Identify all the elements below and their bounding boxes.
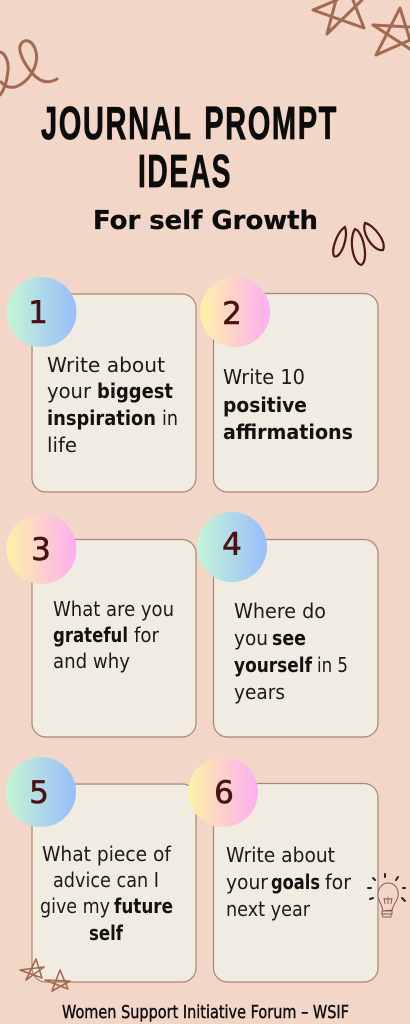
- prompt 1 text: [47, 353, 178, 457]
- prompt 3 text: [53, 597, 174, 673]
- panel: prompt 2: [200, 277, 378, 492]
- panel: prompt 1: [6, 277, 196, 492]
- panel: prompt 5: [6, 757, 196, 982]
- prompt 5 text: advice can I: [53, 868, 159, 892]
- prompt 4 text: Where do: [234, 599, 326, 623]
- number badge 1: [6, 277, 76, 347]
- prompt 6 text: your: [226, 870, 269, 894]
- card 6 box: [214, 784, 378, 982]
- prompt 4 text: in 5: [317, 653, 348, 677]
- prompt 5 text: What piece of: [42, 842, 172, 866]
- icon: light bulb: [368, 874, 405, 917]
- prompt 2 text: Write 10: [223, 365, 305, 389]
- card 1 box: [32, 294, 196, 492]
- number badge 4: [197, 512, 267, 582]
- prompt 3 text: and why: [53, 649, 130, 673]
- icon: stars top right: [313, 0, 410, 55]
- icon: small stars bottom left: [20, 959, 70, 991]
- icon: swirl top left: [0, 41, 57, 95]
- prompt 2 text: [223, 365, 353, 444]
- prompt 1 text: your: [47, 379, 92, 403]
- title: IDEAS: [138, 145, 232, 197]
- number badge 6: 6: [214, 775, 234, 811]
- footer: Women Support Initiative Forum – WSIF: [62, 1003, 349, 1023]
- prompt 6 text: goals: [271, 870, 320, 894]
- card 4 box: [214, 540, 378, 737]
- prompt 1 text: inspiration: [47, 406, 156, 430]
- prompt 4 text: years: [234, 680, 285, 704]
- subtitle: For self Growth: [93, 206, 318, 236]
- prompt 1 text: life: [47, 433, 77, 457]
- prompt 5 text: [40, 842, 173, 945]
- prompt 1 text: Write about: [47, 353, 165, 377]
- number badge 6: [188, 757, 258, 827]
- number badge 3: [6, 514, 76, 584]
- prompt 5 text: self: [89, 921, 124, 945]
- number badge 1: 1: [28, 295, 48, 331]
- prompt 6 text: Write about: [226, 843, 335, 867]
- number badge 4: 4: [222, 527, 242, 563]
- prompt 3 text: grateful: [53, 623, 128, 647]
- number badge 5: 5: [29, 775, 49, 811]
- prompt 2 text: affirmations: [223, 420, 353, 444]
- prompt 5 text: give my: [40, 894, 110, 918]
- prompt 6 text: for: [325, 870, 352, 894]
- prompt 4 text: see: [272, 626, 306, 650]
- number badge 3: 3: [31, 532, 51, 568]
- prompt 4 text: yourself: [234, 653, 313, 677]
- panel: prompt 4: [197, 512, 378, 737]
- prompt 3 text: What are you: [53, 597, 174, 621]
- prompt 4 text: [234, 599, 348, 704]
- prompt 6 text: next year: [226, 897, 310, 921]
- card 2 box: [214, 294, 378, 492]
- icon: petals: [333, 223, 384, 265]
- number badge 2: 2: [222, 296, 242, 332]
- prompt 3 text: for: [134, 623, 160, 647]
- number badge 2: [200, 277, 270, 347]
- prompt 6 text: [226, 843, 352, 921]
- prompt 1 text: in: [162, 406, 178, 430]
- prompt 2 text: positive: [223, 393, 307, 417]
- number badge 5: [6, 757, 76, 827]
- prompt 4 text: you: [234, 626, 268, 650]
- prompt 1 text: biggest: [97, 379, 173, 403]
- card 3 box: [32, 540, 196, 737]
- title: [41, 97, 338, 197]
- card 5 box: [32, 784, 196, 982]
- panel: prompt 6: [188, 757, 378, 982]
- panel: prompt 3: [6, 514, 196, 737]
- prompt 5 text: future: [114, 894, 173, 918]
